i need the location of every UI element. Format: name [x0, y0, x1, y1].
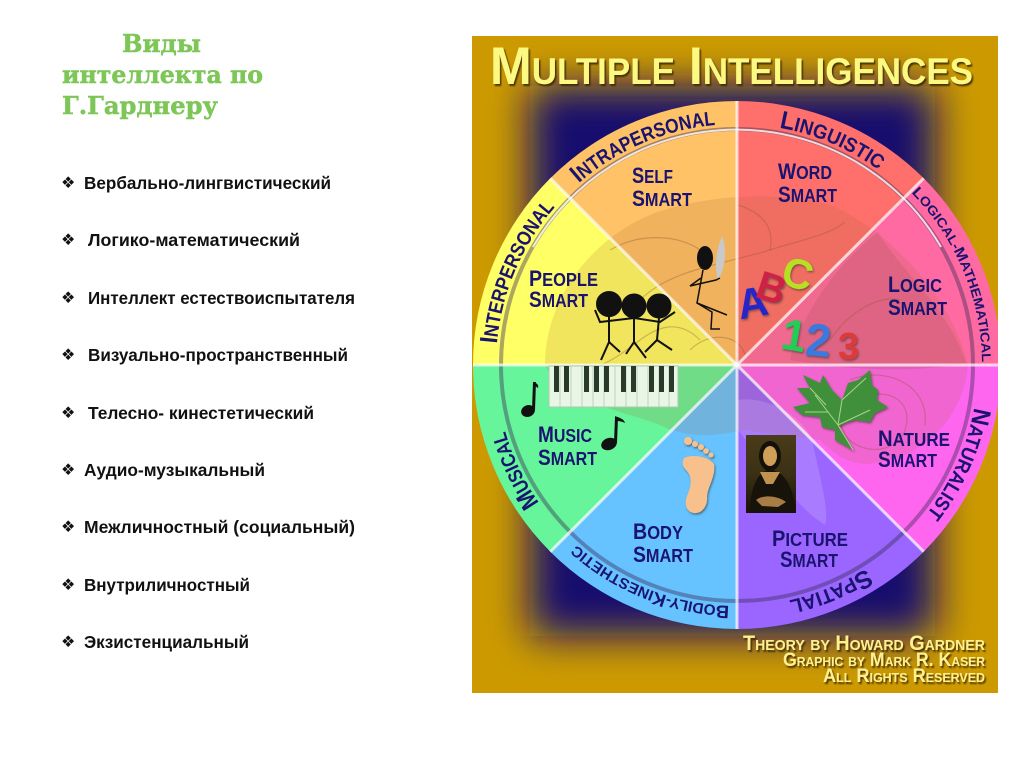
- sector labels: MUSIC: [538, 422, 592, 447]
- icon: seated stick figure with feather: [690, 236, 727, 329]
- ring labels: BODILY-KINESTHETIC: [572, 546, 728, 618]
- list: types of intelligence: ❖: [61, 575, 75, 594]
- sector labels: SMART: [888, 295, 948, 320]
- sector labels: WORD: [778, 159, 832, 184]
- credits: [743, 632, 986, 687]
- icon: ABC letters: [741, 259, 815, 322]
- list: types of intelligence: ❖: [61, 403, 75, 422]
- ring labels: LOGICAL-MATHEMATICAL: [912, 186, 991, 362]
- icon: leaf: [793, 370, 888, 450]
- sector labels: SMART: [780, 547, 839, 572]
- spokes: [473, 101, 1001, 629]
- ring labels: NATURALIST: [929, 408, 991, 522]
- ring labels: INTRAPERSONAL: [568, 112, 715, 182]
- icon: three linked stick figures: [595, 292, 675, 360]
- list: types of intelligence: Аудио-музыкальный: [84, 460, 265, 480]
- title: Виды интеллекта по Г.Гарднеру: Виды: [122, 29, 201, 58]
- list: types of intelligence: ❖: [61, 632, 75, 651]
- title: Виды интеллекта по Г.Гарднеру: интеллекта по: [62, 60, 263, 89]
- list: types of intelligence: Экзистенциальный: [84, 632, 249, 652]
- list: types of intelligence: ❖: [61, 230, 75, 249]
- icon: 123 numbers: 3: [838, 326, 859, 368]
- list: types of intelligence: Логико-математический: [88, 230, 300, 250]
- list: types of intelligence: ❖: [61, 173, 75, 192]
- list: types of intelligence: Межличностный (социальный): [84, 517, 355, 537]
- sector labels: SMART: [778, 182, 838, 207]
- ring labels: [480, 111, 991, 618]
- icon: ABC letters: B: [751, 263, 792, 314]
- icon: music note right: [601, 416, 625, 450]
- ring labels: INTERPERSONAL: [480, 204, 554, 342]
- sector labels: [529, 159, 950, 572]
- sector labels: BODY: [633, 519, 684, 544]
- icon: 123 numbers: 2: [803, 313, 833, 367]
- icon: 123 numbers: 1: [778, 310, 810, 362]
- icon: music note left: [521, 382, 538, 417]
- icon: 123 numbers: [782, 320, 860, 362]
- list: types of intelligence: ❖: [61, 517, 75, 536]
- list: types of intelligence: ❖: [61, 345, 75, 364]
- heading: Multiple Intelligences: Multiple Intelligences: [490, 37, 973, 96]
- sector labels: PEOPLE: [529, 266, 598, 291]
- credits: Graphic by Mark R. Kaser: [783, 650, 986, 671]
- ring divider: [501, 129, 973, 601]
- list: types of intelligence: [61, 173, 355, 652]
- sector labels: PICTURE: [772, 526, 848, 551]
- ring labels: LINGUISTIC: [780, 111, 884, 168]
- ring labels: MUSICAL: [494, 432, 538, 511]
- title: Виды интеллекта по Г.Гарднеру: Г.Гарднеру: [62, 91, 219, 120]
- panel: multiple intelligences poster: [472, 36, 998, 693]
- list: types of intelligence: Телесно- кинестетический: [88, 403, 314, 423]
- list: types of intelligence: Внутриличностный: [84, 575, 250, 595]
- title: Виды интеллекта по Г.Гарднеру: [62, 29, 263, 120]
- icon: Mona Lisa painting: [746, 435, 796, 513]
- list: types of intelligence: ❖: [61, 460, 75, 479]
- wheel: eight coloured sectors: [473, 101, 1001, 629]
- list: types of intelligence: Вербально-лингвистический: [84, 173, 331, 193]
- list: types of intelligence: Интеллект естествоиспытателя: [88, 288, 355, 308]
- icon: foot: [683, 437, 714, 513]
- credits: All Rights Reserved: [823, 666, 985, 687]
- icon: ABC letters: C: [777, 247, 818, 300]
- sector labels: SMART: [529, 287, 589, 312]
- sector labels: SELF: [632, 163, 673, 188]
- brain illustration: [545, 196, 968, 525]
- list: types of intelligence: Визуально-пространственный: [88, 345, 348, 365]
- ring labels: SPATIAL: [790, 570, 872, 612]
- sector labels: SMART: [632, 186, 693, 211]
- sector labels: SMART: [633, 542, 694, 567]
- sector labels: SMART: [538, 445, 598, 470]
- icon: ABC letters: A: [734, 277, 772, 328]
- sector labels: SMART: [878, 447, 938, 472]
- sector labels: LOGIC: [888, 272, 942, 297]
- credits: Theory by Howard Gardner: [743, 632, 985, 655]
- icon: piano keyboard: [549, 366, 678, 407]
- sector labels: NATURE: [878, 426, 950, 451]
- list: types of intelligence: ❖: [61, 288, 75, 307]
